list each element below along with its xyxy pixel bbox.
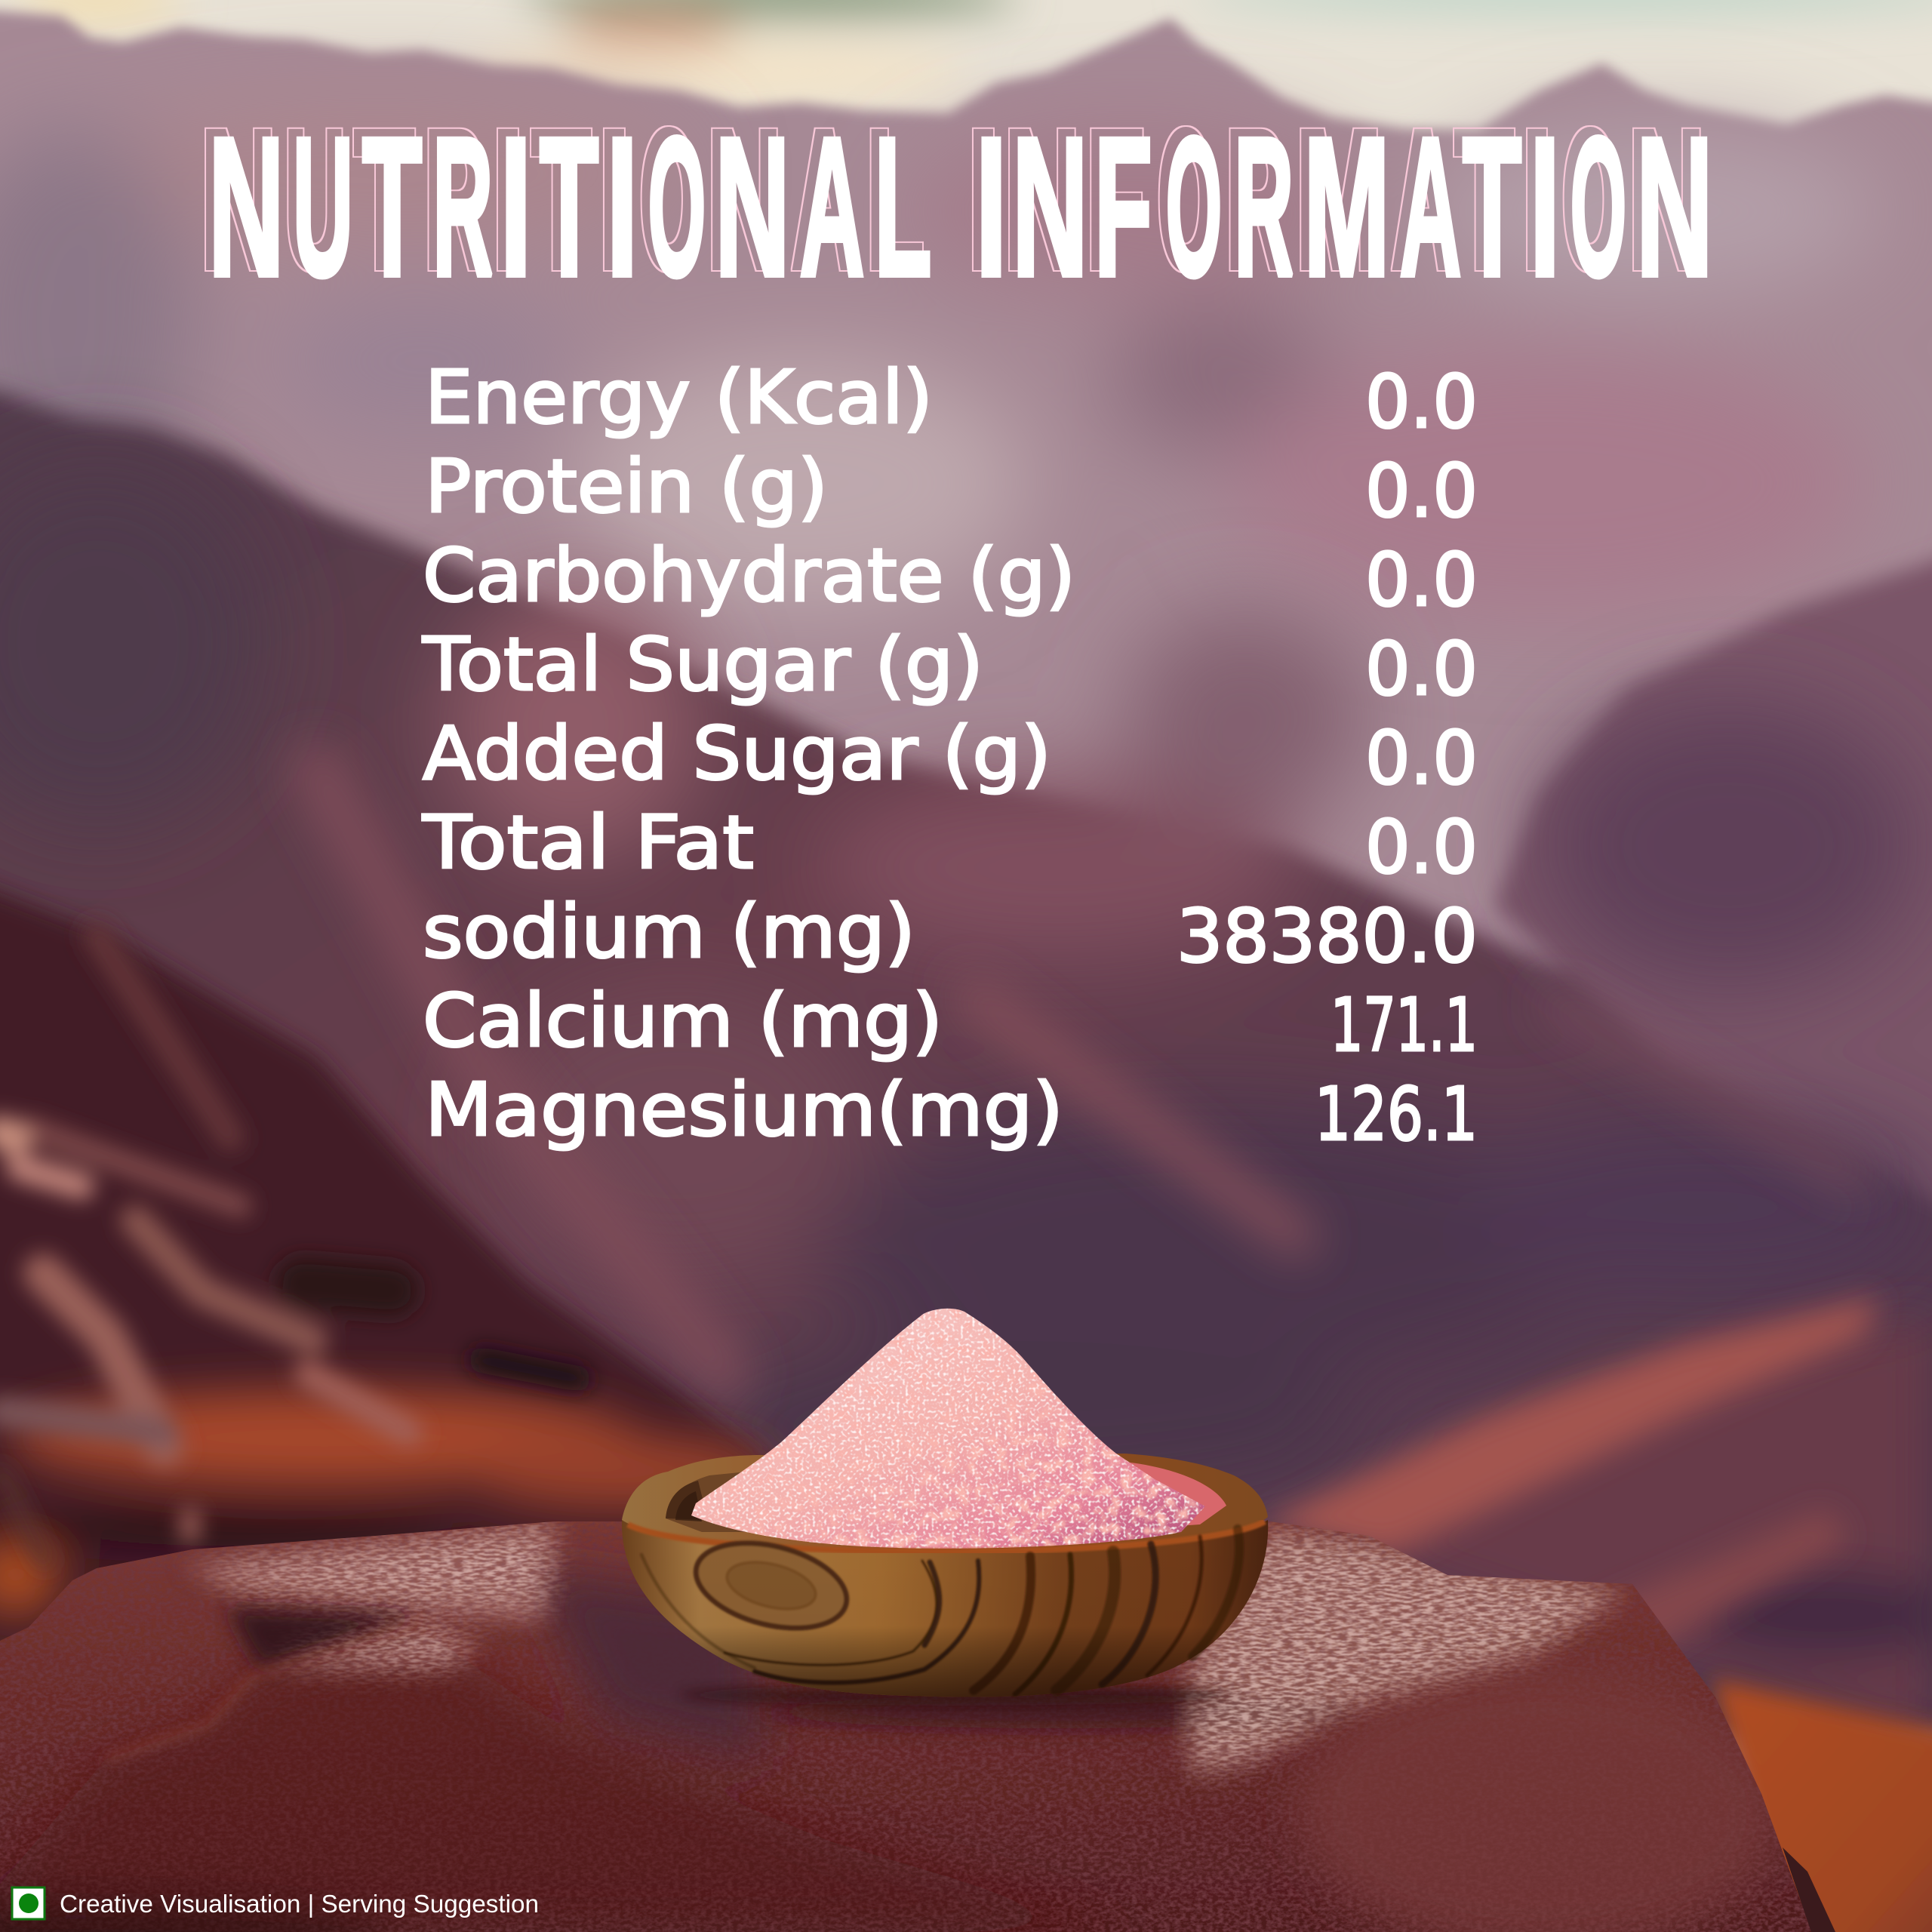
title white text: T [1463, 97, 1521, 317]
title pink outline shadow: N [1629, 89, 1705, 309]
title white text: M [1303, 97, 1390, 317]
row: magnesium: Magnesium(mg) [425, 1067, 1063, 1152]
row: energy: Energy (Kcal) [425, 355, 933, 440]
row: carbohydrate: 0.0 [1365, 537, 1478, 623]
title pink outline shadow: T [1454, 89, 1514, 309]
row: sodium: sodium (mg) [423, 889, 915, 974]
rock pedestal [0, 1521, 1835, 1932]
row: energy [425, 355, 1478, 445]
title pink outline shadow: R [1226, 89, 1286, 309]
title pink outline shadow: F [1087, 89, 1144, 309]
nutrition table [422, 355, 1478, 1157]
bowl rim [622, 1454, 1268, 1556]
icon: vegetarian mark [12, 1887, 45, 1919]
bowl shading [622, 1520, 1268, 1697]
salt mound [691, 1309, 1205, 1549]
title white text: N [208, 97, 285, 317]
row: carbohydrate [423, 533, 1478, 623]
row: total fat: 0.0 [1365, 804, 1478, 890]
title white text: T [540, 97, 598, 317]
title pink outline shadow: I [492, 89, 524, 309]
title white text: O [648, 97, 706, 317]
title pink outline shadow: N [201, 89, 276, 309]
title white text: I [975, 97, 1008, 317]
title pink outline shadow: L [866, 89, 922, 309]
row: added sugar: 0.0 [1365, 715, 1478, 801]
row: total sugar: Total Sugar (g) [422, 622, 983, 707]
title pink outline shadow: T [354, 89, 414, 309]
row: energy: 0.0 [1365, 359, 1478, 445]
row: protein: Protein (g) [425, 444, 828, 529]
row: calcium [423, 978, 1478, 1068]
row: carbohydrate: Carbohydrate (g) [423, 533, 1075, 618]
bowl body [622, 1520, 1268, 1697]
title pink outline shadow: I [968, 89, 999, 309]
title white text: O [1570, 97, 1626, 317]
title pink outline shadow: M [1296, 89, 1382, 309]
title white text: I [500, 97, 532, 317]
title pink outline shadow: R [424, 89, 485, 309]
footer disclaimer [12, 1887, 539, 1919]
title pink outline shadow: N [707, 89, 782, 309]
row: protein [425, 444, 1478, 534]
title white text: N [715, 97, 790, 317]
row: protein: 0.0 [1365, 448, 1478, 534]
title pink outline shadow: I [1521, 89, 1552, 309]
title white text: A [1399, 97, 1461, 317]
row: calcium: 171.1 [1331, 983, 1478, 1068]
title white text: R [432, 97, 494, 317]
background: near-left rocks [0, 875, 770, 1660]
row: sodium: 38380.0 [1177, 894, 1478, 979]
title white text: L [874, 97, 931, 317]
bowl shadow [679, 1684, 1238, 1706]
title white text: I [1530, 97, 1560, 317]
title white text: F [1094, 97, 1152, 317]
row: total sugar [422, 622, 1478, 712]
title white text: N [1636, 97, 1713, 317]
title white text: R [1234, 97, 1294, 317]
bowl front lip [628, 1521, 1265, 1552]
wood grain [641, 1529, 1239, 1694]
row: added sugar [423, 711, 1478, 801]
title white text: I [606, 97, 638, 317]
row: total fat [422, 800, 1478, 890]
footer text: Creative Visualisation | Serving Suggestion [60, 1890, 539, 1918]
title pink outline shadow: U [285, 89, 346, 309]
bowl interior [981, 1461, 1226, 1540]
row: magnesium [425, 1067, 1478, 1157]
title pink outline shadow: A [792, 89, 857, 309]
title pink outline shadow: O [1562, 89, 1619, 309]
title white text: N [1012, 97, 1088, 317]
row: magnesium: 126.1 [1315, 1072, 1478, 1157]
title pink outline shadow: I [598, 89, 630, 309]
salt bowl illustration [622, 1309, 1268, 1706]
title white text: T [362, 97, 422, 317]
row: sodium [423, 889, 1478, 979]
background: right hills [1260, 1297, 1932, 1932]
title pink outline shadow: O [1158, 89, 1214, 309]
background: middle mountain range [0, 377, 1932, 1736]
title pink outline shadow: T [531, 89, 591, 309]
title white text: A [800, 97, 865, 317]
title white text: O [1165, 97, 1222, 317]
row: calcium: Calcium (mg) [423, 978, 943, 1063]
title pink outline shadow: N [1004, 89, 1080, 309]
title pink outline shadow: A [1392, 89, 1454, 309]
title [201, 89, 1713, 317]
row: total sugar: 0.0 [1365, 626, 1478, 712]
title pink outline shadow: O [640, 89, 698, 309]
title white text: U [293, 97, 353, 317]
row: added sugar: Added Sugar (g) [423, 711, 1051, 796]
row: total fat: Total Fat [422, 800, 754, 885]
